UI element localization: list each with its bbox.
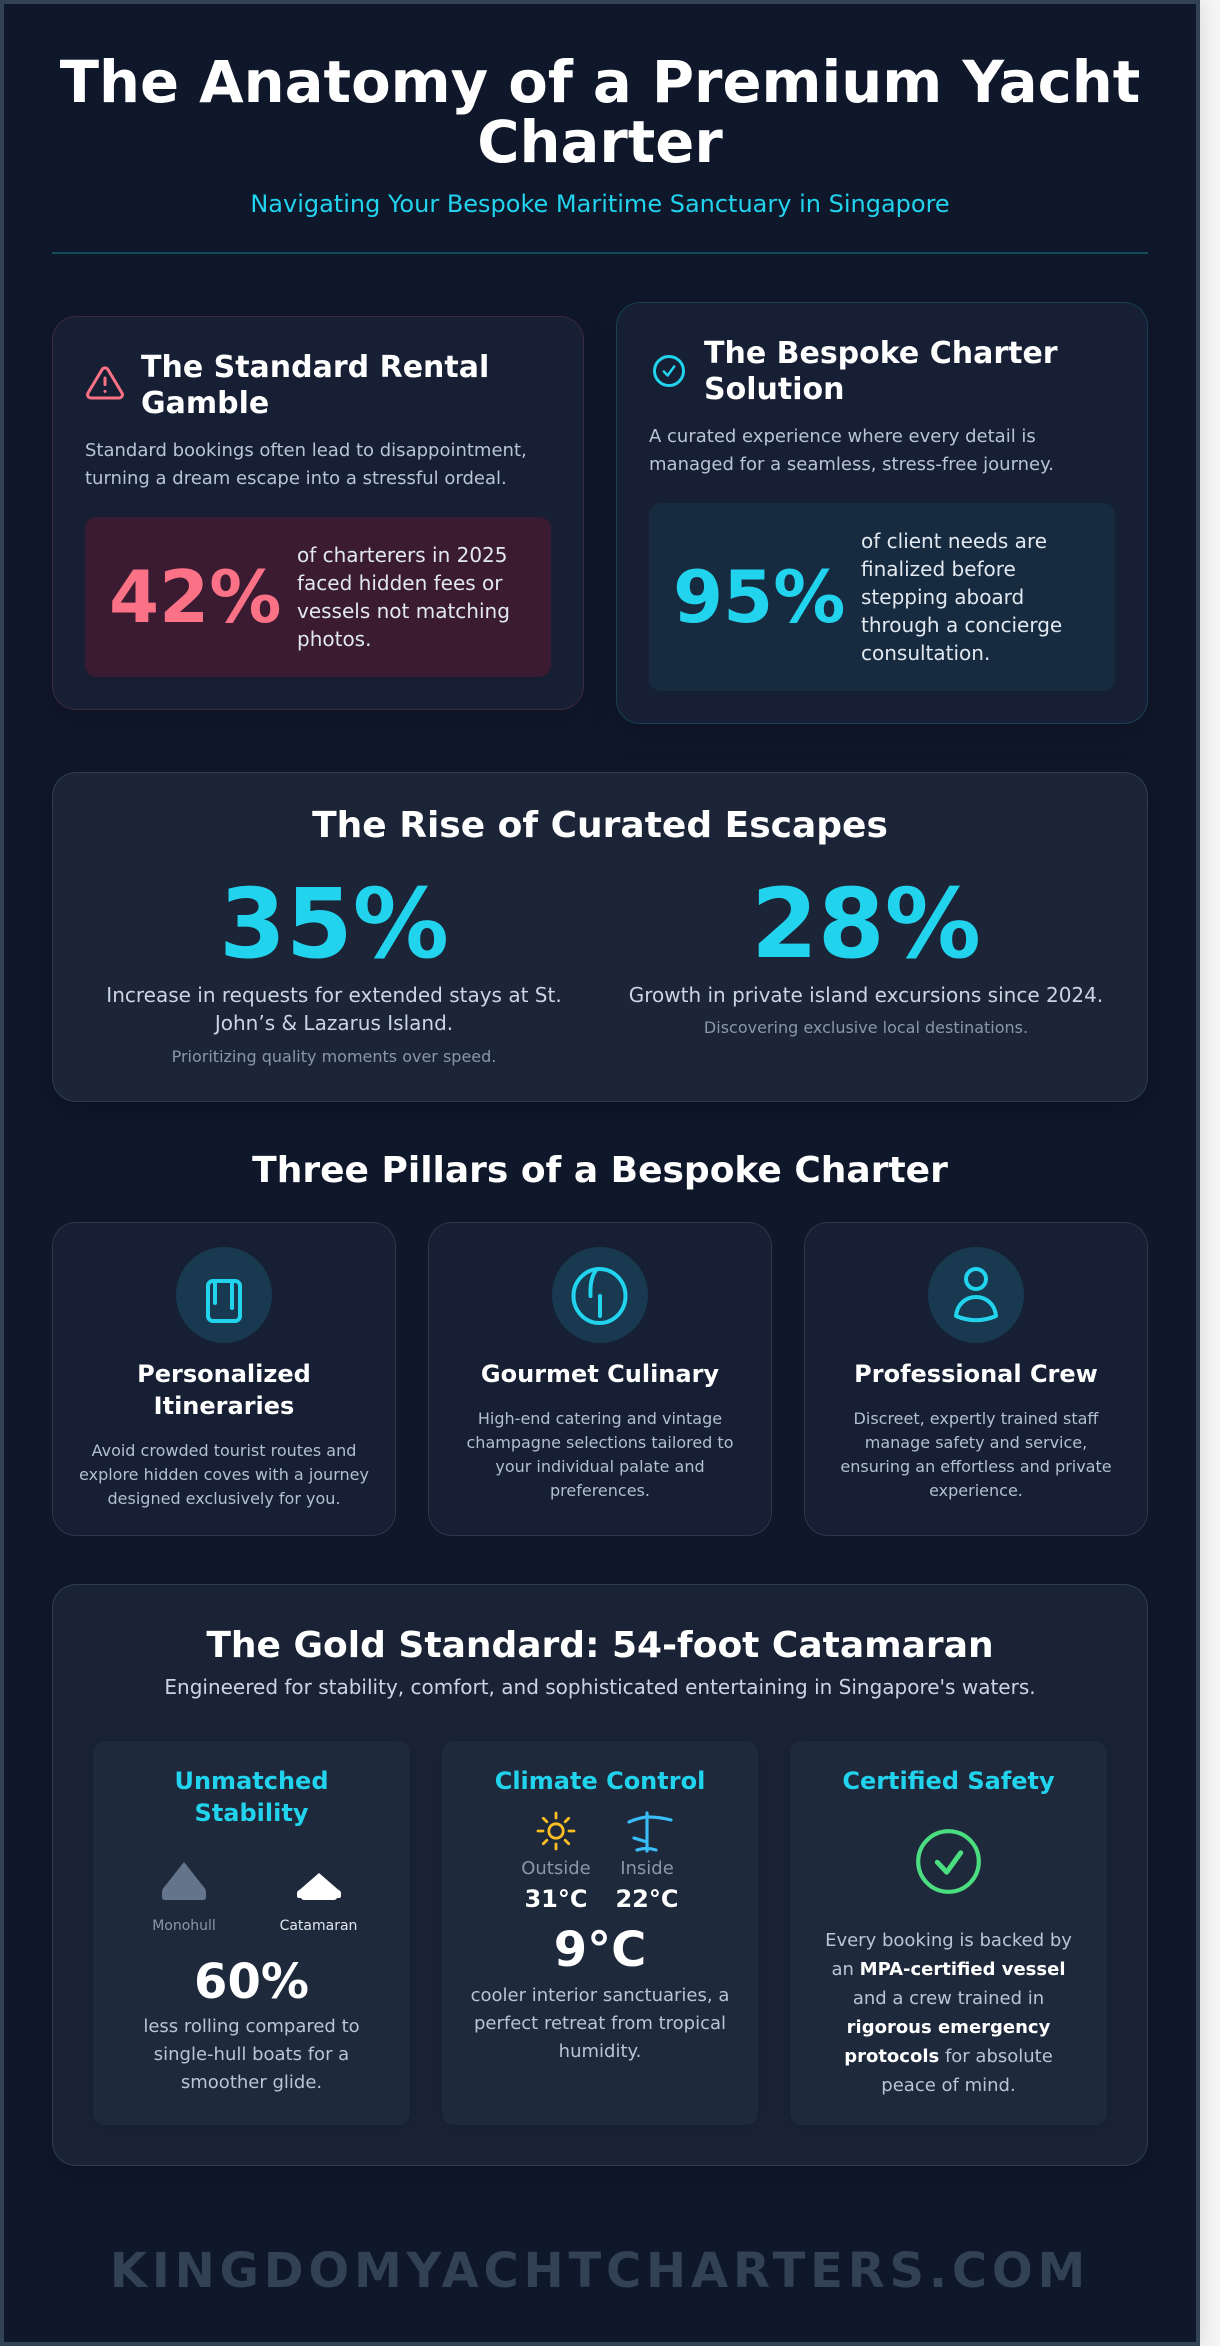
icon: crew person [928, 1247, 1024, 1343]
description: and a crew trained in [853, 1988, 1044, 2009]
heading: The Bespoke Charter [704, 336, 1058, 371]
label: inside: Inside [620, 1858, 674, 1879]
pillar description [466, 1408, 733, 1500]
stat text: faced hidden fees or [297, 571, 502, 595]
description: an MPA-certified vessel [831, 1959, 1066, 1980]
description: Standard bookings often lead to disappointment, [85, 440, 527, 461]
pillar description: manage safety and service, [865, 1432, 1087, 1452]
heading [704, 336, 1058, 407]
pillar title: Personalized [137, 1360, 311, 1388]
title: The Anatomy of a Premium Yacht [60, 49, 1140, 116]
stat description: Growth in private island excursions since 2024. [629, 983, 1103, 1007]
pillar description [840, 1408, 1112, 1500]
value: 31°C: 31°C [524, 1885, 588, 1913]
pillar description: Discreet, expertly trained staff [854, 1408, 1098, 1428]
panel: gourmet culinary [428, 1222, 772, 1536]
label: catamaran: Catamaran [280, 1918, 357, 1934]
icon: monohull [162, 1862, 206, 1900]
stat text: stepping aboard [861, 585, 1024, 609]
title: Charter [477, 109, 723, 176]
card title: Unmatched [174, 1767, 329, 1795]
icon: culinary [552, 1247, 648, 1343]
pillar description: ensuring an effortless and private [840, 1456, 1112, 1476]
icon: sun [536, 1812, 576, 1850]
stat text [297, 543, 510, 651]
stat number: 28% [751, 868, 981, 980]
stat description: John’s & Lazarus Island. [215, 1011, 453, 1035]
description: peace of mind. [881, 2075, 1016, 2096]
heading: The Gold Standard: 54-foot Catamaran [206, 1624, 994, 1666]
pillar description: experience. [929, 1480, 1023, 1500]
stat number: 95% [673, 555, 845, 639]
sub-heading: Engineered for stability, comfort, and sophisticated entertaining in Singapore's waters. [164, 1675, 1036, 1699]
description [471, 1984, 729, 2062]
card: unmatched stability [93, 1741, 410, 2125]
stat text: vessels not matching [297, 599, 510, 623]
stat callout: 42% [85, 517, 551, 677]
subtitle: Navigating Your Bespoke Maritime Sanctuary in Singapore [250, 190, 950, 218]
pillar description: champagne selections tailored to [466, 1432, 733, 1452]
stat number: 42% [109, 555, 281, 639]
heading [141, 350, 489, 421]
heading: Solution [704, 372, 844, 407]
heading: Gamble [141, 386, 269, 421]
icon: check circle [653, 355, 685, 387]
stat text: of charterers in 2025 [297, 543, 508, 567]
panel: professional crew [804, 1222, 1148, 1536]
card: certified safety [790, 1741, 1107, 2125]
big stat: 60% [194, 1954, 309, 2010]
icon: catamaran [297, 1873, 341, 1900]
pillar title: Professional Crew [854, 1360, 1098, 1388]
stat note: Prioritizing quality moments over speed. [172, 1047, 496, 1066]
stat number: 35% [219, 868, 449, 980]
description: cooler interior sanctuaries, a [471, 1984, 729, 2006]
description [85, 440, 527, 489]
panel: the standard rental gamble [52, 316, 584, 710]
stat column: 28% [629, 868, 1103, 1037]
description: humidity. [559, 2040, 641, 2062]
panel: personalized itineraries [52, 1222, 396, 1536]
label: monohull: Monohull [152, 1918, 216, 1934]
heading: The Standard Rental [141, 350, 489, 385]
big stat: 9°C [554, 1922, 646, 1978]
stat note: Discovering exclusive local destinations. [704, 1018, 1028, 1037]
description [649, 426, 1054, 475]
footer brand: KINGDOMYACHTCHARTERS.COM [110, 2243, 1090, 2299]
panel: the rise of curated escapes [52, 772, 1148, 1102]
icon: air conditioning [627, 1811, 673, 1853]
stat text: photos. [297, 627, 371, 651]
description [143, 2016, 360, 2093]
card title [174, 1767, 329, 1827]
description [825, 1930, 1072, 2096]
pillar description: designed exclusively for you. [108, 1488, 340, 1508]
card title: Certified Safety [842, 1767, 1055, 1795]
description: single-hull boats for a [154, 2044, 349, 2065]
description: managed for a seamless, stress-free journey. [649, 454, 1054, 475]
pillar title: Itineraries [154, 1392, 294, 1420]
icon: warning triangle [86, 366, 124, 400]
stat text: finalized before [861, 557, 1016, 581]
stat text: consultation. [861, 641, 990, 665]
pillar description: Avoid crowded tourist routes and [92, 1440, 356, 1460]
title [60, 49, 1140, 176]
description: rigorous emergency [847, 2017, 1050, 2038]
section heading: three pillars: Three Pillars of a Bespoke Charter [252, 1150, 948, 1191]
card: climate control [442, 1741, 758, 2125]
header: title and subtitle [52, 49, 1148, 254]
card title: Climate Control [495, 1767, 705, 1795]
icon: itinerary book [176, 1247, 272, 1343]
stat text: of client needs are [861, 529, 1047, 553]
heading: The Rise of Curated Escapes [312, 805, 888, 846]
value: 22°C: 22°C [615, 1885, 678, 1913]
description: smoother glide. [181, 2072, 322, 2093]
label: outside: Outside [521, 1858, 591, 1879]
panel: the bespoke charter solution [616, 302, 1148, 724]
pillar title: Gourmet Culinary [481, 1360, 719, 1388]
pillar title [137, 1360, 311, 1420]
description: A curated experience where every detail is [649, 426, 1036, 447]
description: Every booking is backed by [825, 1930, 1072, 1951]
pillar description: explore hidden coves with a journey [79, 1464, 369, 1484]
stat description [106, 983, 562, 1035]
stat text: through a concierge [861, 613, 1062, 637]
description: perfect retreat from tropical [474, 2012, 726, 2034]
stat description: Increase in requests for extended stays at St. [106, 983, 562, 1007]
card title: Stability [195, 1799, 308, 1827]
description: less rolling compared to [143, 2016, 360, 2037]
description: turning a dream escape into a stressful ordeal. [85, 468, 507, 489]
pillar description: your individual palate and [495, 1456, 705, 1476]
stat text [861, 529, 1062, 665]
icon: safety check [916, 1829, 981, 1894]
pillar description: High-end catering and vintage [478, 1408, 722, 1428]
panel: the gold standard [52, 1584, 1148, 2166]
stat column: 35% [106, 868, 562, 1066]
pillar description [79, 1440, 369, 1508]
pillar description: preferences. [550, 1480, 650, 1500]
description: protocols for absolute [844, 2046, 1053, 2067]
stat callout: 95% [649, 503, 1115, 691]
